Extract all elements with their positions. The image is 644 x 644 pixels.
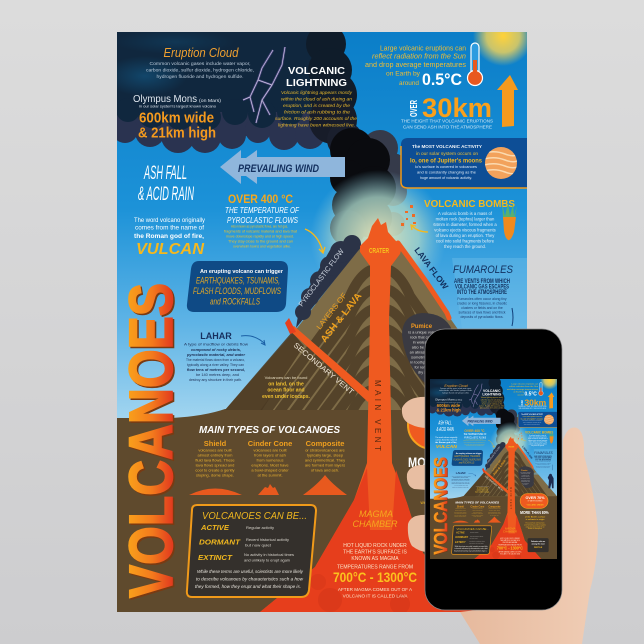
panel: fact box [432,545,500,590]
callout: olympus mons: & 21km high [138,124,216,142]
arrow: up [497,75,518,127]
main vent and magma chamber [260,218,476,614]
callout: more than 80 percent: is volcanic in origin [426,481,486,488]
callout: olympus mons: 600km wide [139,110,214,126]
callout: magma chamber: CHAMBER [352,519,398,529]
panel: volcanoes can be: ACTIVE [200,523,230,532]
column: shield: almost entirely from [198,452,233,458]
callout: more than 80 percent: and gases released into the air [425,506,487,511]
label: lava flow: LAVA FLOW [412,245,451,292]
heading: main types: MAIN TYPES OF VOLCANOES [199,425,340,436]
panel: hazards triggered: EARTHQUAKES, TSUNAMIS, [196,276,280,286]
text: volcanic lightning: surface. Roughly 200 accounts of the [275,116,358,121]
text: volcanic bombs: cool into solid fragments before [436,238,495,244]
panel: fact box: Volcanic soils are [443,554,489,560]
text: volcanic lightning: within the cloud of ash during an [281,96,353,102]
callout: climate cooling: around [399,80,419,87]
column: cinder cone: from layers of ash [254,452,286,458]
hand [402,397,598,644]
callout: lahar: composed of rocky debris, [191,347,241,352]
panel: fumaroles: surfaces of lava flows and thick [459,310,506,314]
sky [117,32,527,422]
panel: io moon: The MOST VOLCANIC ACTIVITY [412,144,482,149]
callout: lahar: LAHAR [200,331,232,341]
panel: hazards triggered: An erupting volcano can trigger [200,269,284,275]
heading: eruption cloud: Eruption Cloud [164,46,239,60]
text: volcanic bombs: 64mm in diameter, formed when a [433,222,497,227]
panel: pumice: an abrasive and is [410,350,441,354]
volcano cross-section [225,247,527,430]
secondary vent [285,318,371,402]
callout: 30km height: THE HEIGHT THAT VOLCANIC ERUPTIONS [401,118,493,124]
panel: pumice: in water. It can [413,340,437,344]
column: composite: are formed from layers [305,462,345,468]
column: cinder cone: at the summit. [257,472,283,478]
text: volcanic lightning [275,90,358,128]
text: where volcanoes are found: even under icecaps. [262,394,311,400]
column: composite: of lava and ash. [311,468,339,472]
phone [425,329,562,610]
callout: magma chamber: AFTER MAGMA COMES OUT OF A [338,587,413,592]
arrow: pyroclastic flow pointer [305,229,325,253]
ground [117,409,527,612]
column: shield [189,439,242,495]
callout: climate cooling [365,46,467,89]
panel: volcanoes can be: to describe volcanoes by characteristics such a how [196,576,304,582]
panel: hazards triggered: and ROCKFALLS [210,296,260,306]
phone screen: poster preview [426,371,559,560]
callout: lahar: be 140 metres deep, and [196,373,239,377]
callout: lahar: flow tens of metres per second, [187,368,245,372]
label: crater: CRATER [369,248,389,255]
callout: climate cooling: reflect radiation from the Sun [372,54,466,60]
panel: hazards triggered: FLASH FLOODS, MUDFLOWS [193,286,281,296]
title: volcanoes: VOLCANOES [118,284,186,600]
panel: fumaroles: INTO THE ATMOSPHERE [457,290,507,296]
text: vulcan: The word volcano originally [134,217,206,224]
panel: volcanoes can be [187,505,316,597]
poster: & ACID RAIN [138,184,194,205]
text: volcanic lightning: Volcanic lightning appears mostly [281,90,353,95]
callout: magma chamber: TEMPERATURES RANGE FROM [337,564,413,570]
sun [473,6,533,66]
arrow: prevailing wind [220,150,345,184]
text: volcanic lightning: friction of ash rubbing to the [284,110,351,114]
callout: over 70 percent: VOLCANIC ORIGIN [429,436,483,442]
text: eruption cloud gases: Common volcanic gases include water vapor, [150,61,250,66]
panel: fumaroles: clusters or fields and on the [461,306,503,310]
callout: magma chamber: THE EARTH'S SURFACE IS [343,550,407,556]
column: cinder cone: volcanoes are built [253,448,288,452]
column: shield: cool to create a gently [195,468,235,472]
panel: volcanoes can be: Recent historical activity [246,538,289,542]
callout: olympus mons [133,94,222,142]
callout: magma chamber [333,509,417,598]
icon: jupiter [484,147,520,179]
callout: pyroclastic temperature: move downslope rapidly and at high speed. [226,234,294,238]
finger three [408,515,427,552]
panel: volcanoes can be: EXTINCT [198,553,233,562]
column: shield: fluid lava flows. These [195,458,235,462]
panel: fumaroles: deposits of pyroclastic flows. [461,315,504,319]
panel: pumice: for removing [414,366,436,370]
text: volcanic bombs: they reach the ground. [444,244,486,249]
column: cinder cone: eruptions. Most have [251,462,289,468]
column: shield: Shield [204,439,227,448]
text: volcanic bombs: A volcanic bomb is a mass of [438,211,493,216]
column: shield: lava flows spread and [196,462,234,468]
icon: thermometer [468,43,482,86]
callout: pyroclastic temperature: Also known as pyroclastic flows, are hot gas, [231,224,288,228]
text: eruption cloud gases: carbon dioxide, sulfur dioxide, hydrogen chloride, [146,68,254,72]
column: cinder cone: a bowl-shaped crater [251,468,289,472]
label: layers of ash and lava: LAYERS OF [314,291,349,331]
heading: volcanic lightning: LIGHTNING [286,77,347,89]
text: eruption cloud gases: hydrogen fluoride and hydrogen sulfide. [156,74,244,79]
column: composite: typically large, steep [307,452,344,458]
lightning [243,47,285,123]
callout: pyroclastic temperature: fragments of volcanic material and lava that [224,230,298,234]
panel: pumice: dry skin. [418,370,432,374]
callout: 30km height: CAN SEND ASH INTO THE ATMOSPHERE [403,124,492,130]
lava flow stream [398,243,449,318]
callout: magma chamber: KNOWN AS MAGMA [351,556,399,562]
text: where volcanoes are found: on land, on the [268,382,304,388]
column: composite: or stratovolcanoes are [305,448,346,452]
text: eruption cloud gases [146,61,254,79]
panel: pumice: sometimes used [411,356,439,360]
panel: io moon: Io, one of Jupiter's moons [410,158,483,164]
finger two [407,465,427,490]
label: ash fall and acid rain [138,163,194,205]
callout: olympus mons: Olympus Mons [133,94,197,105]
callout: magma chamber: HOT LIQUID ROCK UNDER [343,543,407,549]
text: where volcanoes are found [262,375,311,400]
text: volcanic bombs: volcano ejects viscous fragments [434,228,496,232]
callout: 30km height: 30km [422,93,492,123]
callout: pyroclastic temperature: OVER 400 °C [228,194,293,206]
panel: fumaroles: ARE VENTS FROM WHICH [454,279,510,285]
panel: volcanoes can be: and unlikely to erupt again [244,558,290,562]
label: main vent: MAIN VENT [373,380,382,454]
callout: over 70 percent [408,401,498,449]
icon: volcanic bomb [502,203,517,240]
text: volcanic lightning: lightning have been witnessed live. [278,122,355,128]
panel: volcanoes can be: they formed, how they erupt and what their shape is. [195,584,301,590]
callout: lahar: typically along a river valley. They can [187,363,244,367]
panel: io moon: in our solar system occurs on [416,151,479,156]
panel: volcanoes can be: but now quiet [245,544,272,548]
callout: climate cooling: and drop average temperatures [365,62,467,69]
text: volcanic lightning: eruption, and is created by the [283,103,351,108]
panel: pumice [402,313,452,383]
column: cinder cone: Cinder Cone [248,439,292,448]
panel: volcanoes can be: VOLCANOES CAN BE... [202,511,307,522]
panel: fumaroles: Fumaroles often occur along tiny [457,297,507,301]
callout: olympus mons: in our solar system's largest known volcano [139,104,216,108]
heading: volcanic bombs: VOLCANIC BOMBS [424,198,515,210]
column: composite [303,439,347,495]
volcanic bomb fragments [401,205,416,226]
callout: climate cooling: on Earth by [386,70,421,78]
panel: io moon [401,138,527,188]
callout: lahar: destroy any structure in their path. [189,378,242,382]
panel: volcanoes can be: DORMANT [199,538,242,546]
callout: olympus mons: (on Mars) [199,98,222,103]
panel: fumaroles: FUMAROLES [453,264,514,276]
callout: pyroclastic temperature: THE TEMPERATURE OF [225,206,300,215]
text: vulcan: comes from the name of [135,224,204,232]
callout: more than 80 percent: of the Earth's surface [423,473,489,480]
storm cloud [103,30,350,153]
heading: volcanic lightning: VOLCANIC [288,65,345,77]
callout: 30km height [401,93,493,130]
column: cinder cone [248,439,292,495]
poster [103,6,533,614]
callout: more than 80 percent: MORE THAN 80% [408,454,500,470]
panel: fumaroles: cracks or long fissures, in chaotic [457,302,507,306]
panel: pumice: Pumice [411,323,432,330]
callout: lahar [184,331,265,382]
callout: climate cooling: Large volcanic eruptions can [380,46,466,52]
panel: pumice: is a unique volcanic [408,330,442,334]
callout: pyroclastic temperature: overwhelm towns and vegetation alike. [233,244,291,248]
text: vulcan: the Roman god of fire, [134,233,204,240]
callout: magma chamber: MAGMA [359,509,393,519]
text: where volcanoes are found: ocean floor and [267,388,305,394]
arrow: prevailing wind: PREVAILING WIND [238,163,319,175]
callout: magma chamber: 700°C - 1300°C [333,569,417,585]
callout: more than 80 percent: The ocean floor and mountains [425,494,488,499]
panel: io moon: Io's surface is covered in volcanoes [415,165,477,169]
callout: lahar: The material flows down from a volcano, [186,358,245,362]
eruption column smoke [306,24,409,246]
callout: climate cooling: 0.5°C [422,70,462,89]
heading: volcanic lightning [286,65,347,89]
label: ash fall and acid rain: ASH FALL [144,163,187,184]
icon: person silhouette [497,337,516,384]
crater glow [310,170,446,306]
title: volcanoes: VOLCANOES [117,283,185,598]
callout: magma chamber: VOLCANO IT IS CALLED LAVA [343,594,408,598]
callout: 30km height: OVER [409,100,420,117]
column: shield: sloping, dome shape. [196,472,234,478]
panel: pumice: rock that can float [410,336,441,340]
callout: more than 80 percent [408,454,500,517]
text: volcanic bombs: of lava during an eruption. They [436,233,495,238]
pyroclastic flow cloud [295,235,362,328]
panel: fumaroles [445,258,527,340]
text: vulcan: VULCAN [136,241,205,258]
finger one [402,397,427,428]
panel: volcanoes can be: While these terms are useful, scientists are more likely [197,569,304,575]
label: secondary vent: SECONDARY VENT [292,341,356,397]
panel: volcanoes can be: Regular activity [246,526,274,530]
panel: pumice: also be used as [412,346,438,350]
callout: lahar: pyroclastic material, and water [186,352,245,357]
panel: fact box: FERTILE [452,571,480,578]
callout: pyroclastic temperature: They stay close to the ground and can [228,240,293,244]
panel: pumice: in toothpaste and [410,360,440,364]
column: shield: volcanoes are built [198,448,233,452]
column: cinder cone: from numerous [257,458,283,462]
panel: fact box: among the most [445,562,487,568]
panel: volcanoes can be: No activity in historical times [244,553,294,557]
callout: over 70 percent: OVER 70% [425,407,487,421]
panel: io moon: huge amount of volcanic activity. [420,176,472,180]
callout: lahar: A type of mudflow or debris flow [184,342,248,346]
panel: hazards triggered [187,261,288,312]
arrow: volcanic bombs pointer [411,225,428,232]
callout: more than 80 percent: were formed by countless eruptions [420,500,492,505]
callout: pyroclastic temperature: PYROCLASTIC FLOWS [227,216,299,225]
callout: pyroclastic temperature [224,194,300,248]
panel: fumaroles: VOLCANIC GAS ESCAPES [455,284,509,290]
panel: io moon: and is constantly changing as the [417,170,476,174]
callout: over 70 percent: OF EARTH'S SURFACE [431,422,481,427]
text: where volcanoes are found: Volcanoes can be found [265,375,307,380]
text: vulcan [134,217,206,258]
label: layers of ash and lava: ASH & LAVA [319,291,364,345]
text: volcanic bombs: molten rock (tephra) larger than [436,216,495,222]
callout: more than 80 percent: formed the atmosphere [433,512,480,517]
column: composite: Composite [306,439,344,448]
text: volcanic bombs [433,211,497,249]
label: pyroclastic flow: PYROCLASTIC FLOW [296,247,346,308]
column: composite: and symmetrical. They [305,458,345,462]
